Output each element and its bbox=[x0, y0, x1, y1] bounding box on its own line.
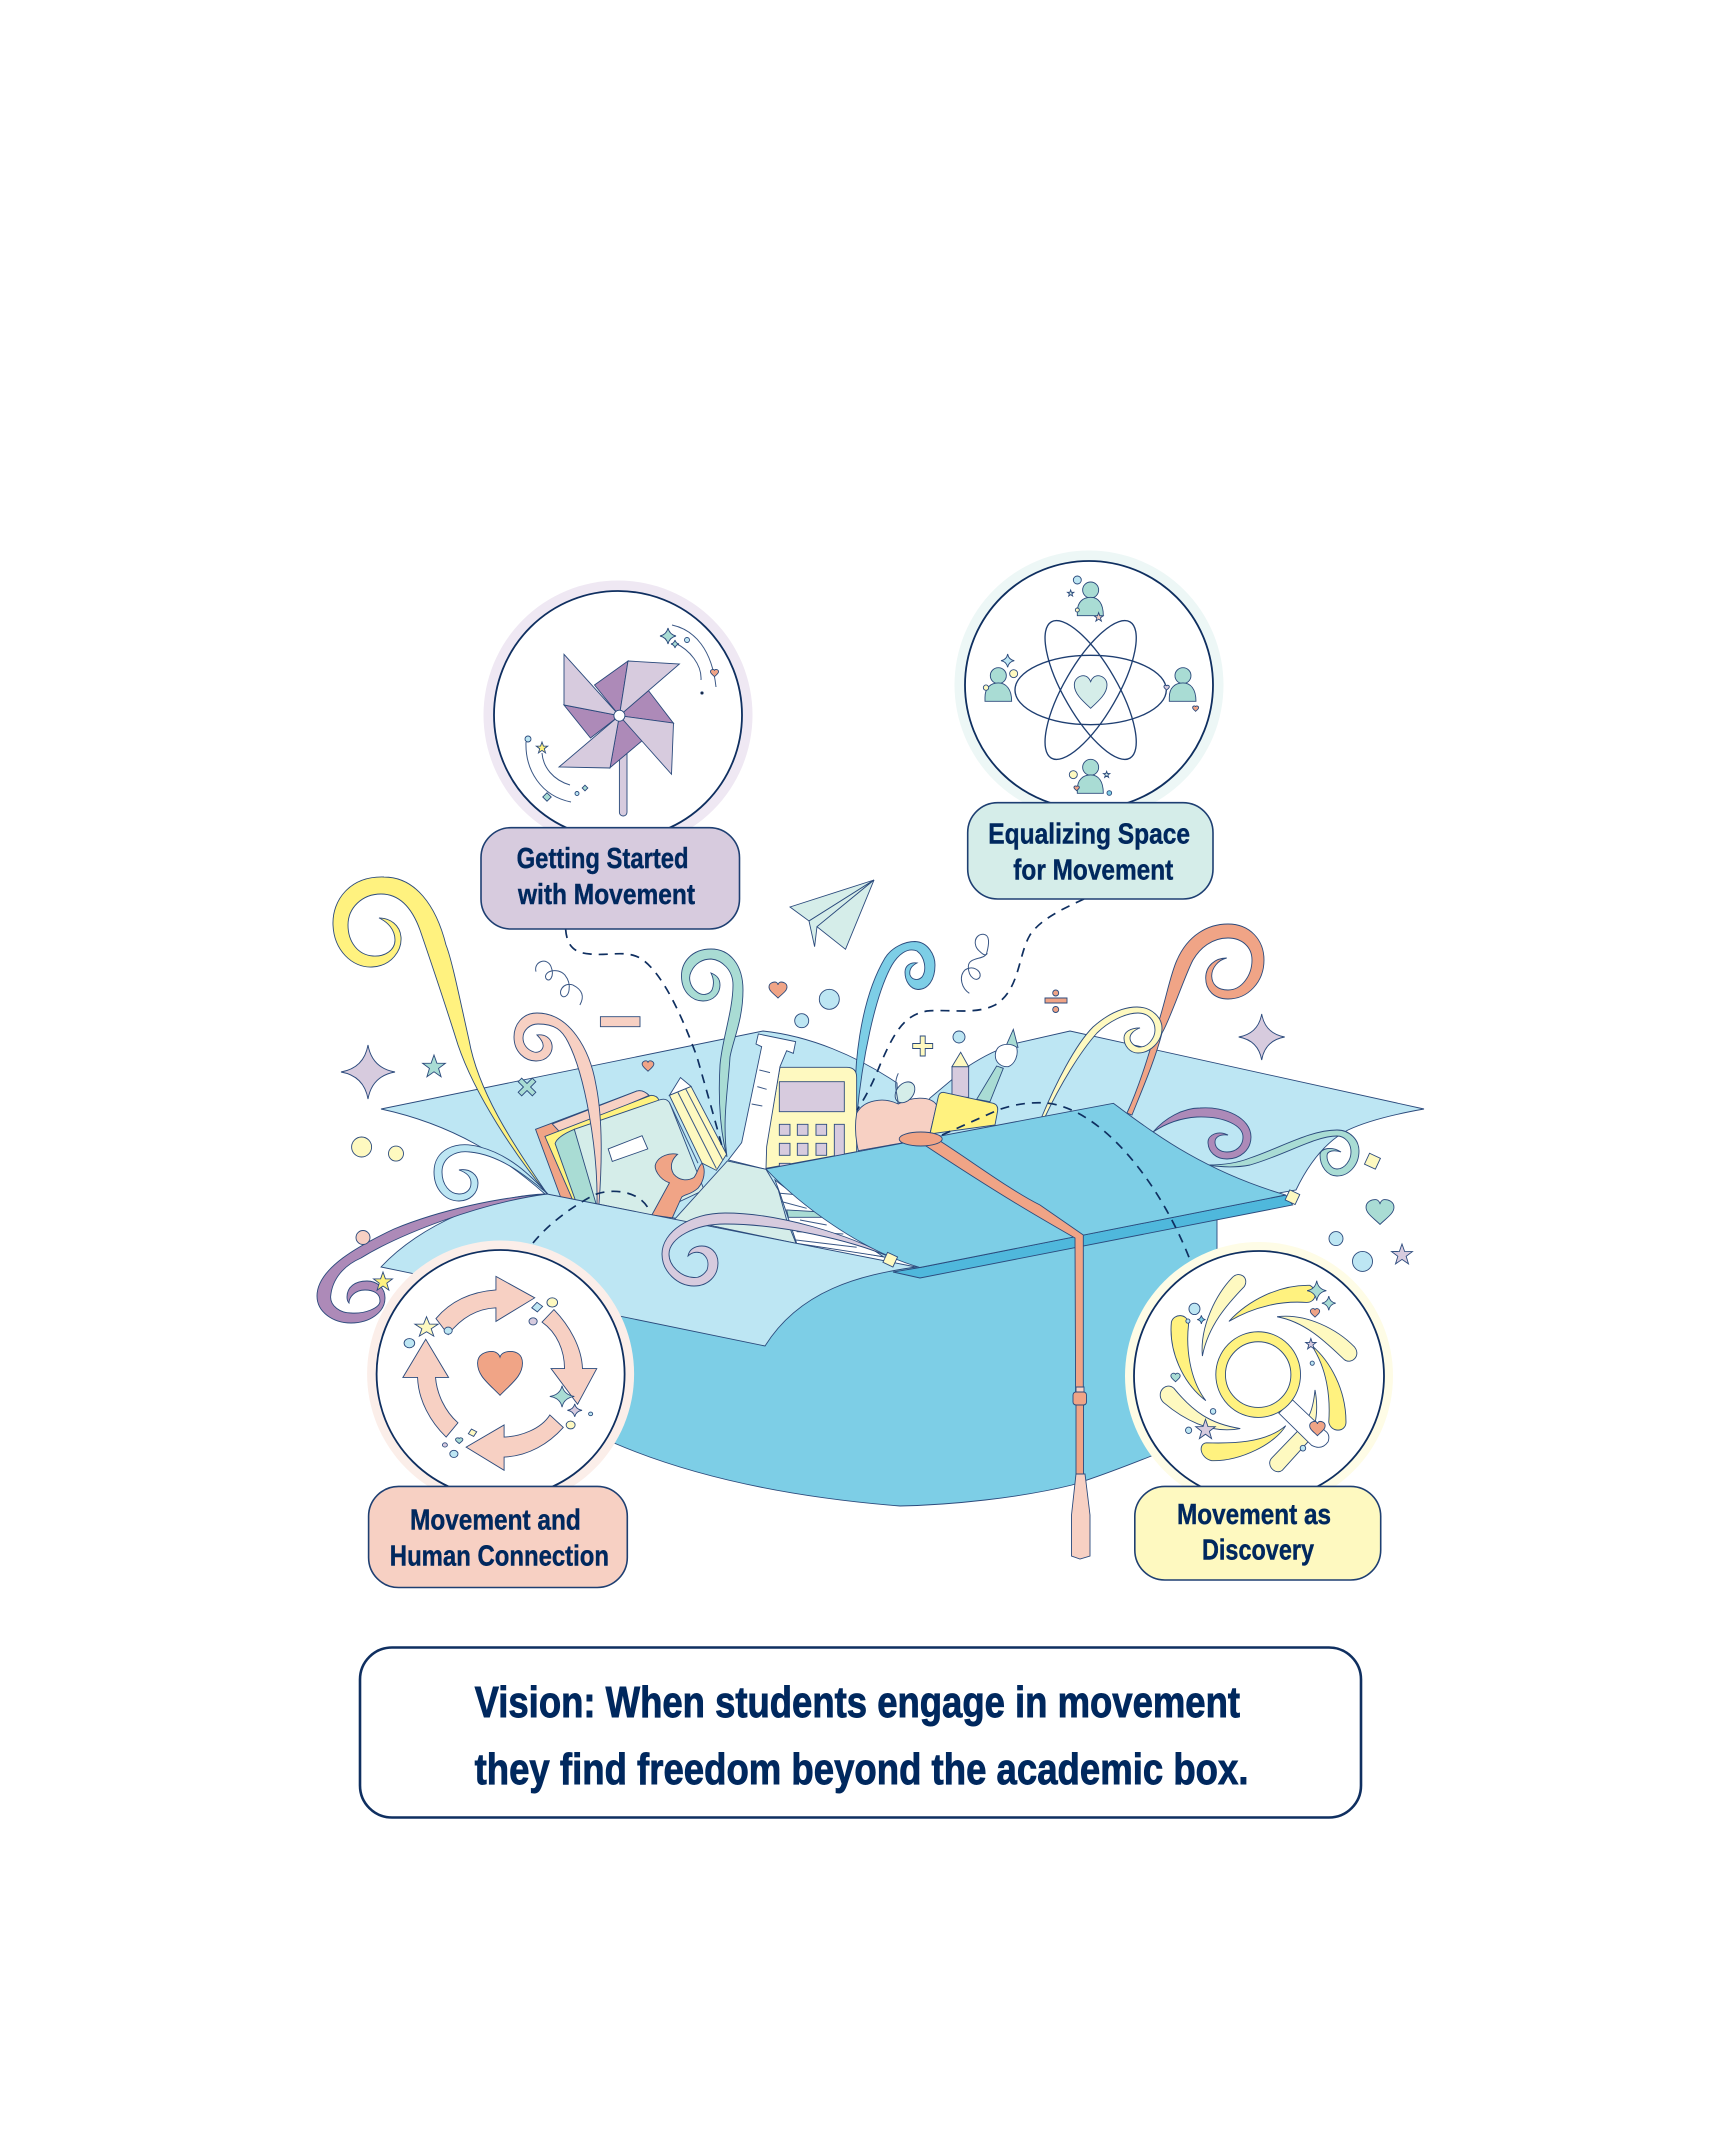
panel: movement as discovery bbox=[1125, 1242, 1393, 1580]
floating shapes left bbox=[341, 1017, 654, 1290]
back flap of box bbox=[381, 1031, 1424, 1260]
label: getting started: Getting Started bbox=[517, 843, 689, 875]
paper plane bbox=[790, 880, 874, 949]
icon: cycle arrows with heart bbox=[403, 1276, 597, 1470]
label: getting started: with Movement bbox=[517, 879, 695, 911]
school supplies: ruler, flask, calculator, notebook, apple bbox=[673, 1034, 937, 1257]
vision statement box bbox=[360, 1648, 1361, 1818]
school supplies: pencil, brush, eraser bbox=[930, 1029, 1018, 1134]
label: discovery bbox=[1135, 1486, 1381, 1580]
label: human connection bbox=[369, 1486, 627, 1588]
panel: getting started with movement bbox=[481, 580, 752, 929]
swirl: peach bbox=[514, 1013, 601, 1204]
label: equalizing space bbox=[968, 803, 1213, 899]
label: getting started bbox=[481, 828, 740, 929]
swirl: pale yellow bbox=[1042, 1007, 1162, 1117]
swirl: light blue bbox=[434, 1145, 548, 1201]
icon: magnifier and swirl petals bbox=[1160, 1275, 1357, 1472]
panel: equalizing space for movement bbox=[954, 550, 1224, 899]
front flap of box bbox=[381, 1194, 916, 1346]
swirl: orange bbox=[1127, 924, 1264, 1115]
mortarboard underside strip bbox=[893, 1195, 1293, 1278]
vision statement box: Vision: When students engage in movement bbox=[475, 1678, 1240, 1727]
swirl: blue bbox=[855, 942, 935, 1117]
squiggles bbox=[536, 934, 989, 1005]
panel: movement and human connection bbox=[367, 1240, 634, 1588]
floating shapes right bbox=[883, 1014, 1412, 1271]
label: human connection: Human Connection bbox=[390, 1541, 609, 1573]
swirl: lavender bbox=[662, 1213, 890, 1286]
swirl: teal right bbox=[1208, 1130, 1359, 1176]
label: equalizing space: Equalizing Space bbox=[988, 818, 1190, 850]
label: discovery: Movement as bbox=[1177, 1499, 1331, 1531]
label: human connection: Movement and bbox=[410, 1504, 581, 1536]
floating shapes centre bbox=[769, 982, 1067, 1056]
dashed connectors bbox=[533, 899, 1192, 1265]
vision statement box: they find freedom beyond the academic box. bbox=[475, 1745, 1249, 1794]
mortarboard top bbox=[766, 1103, 1286, 1268]
icon: pinwheel bbox=[525, 625, 719, 816]
tassel bbox=[899, 1132, 1090, 1559]
school supplies: books and wrench bbox=[536, 1077, 727, 1218]
icon: atom with people and heart bbox=[983, 576, 1199, 795]
swirl: purple right bbox=[1153, 1108, 1251, 1159]
cap box body bbox=[600, 1215, 1217, 1506]
label: discovery: Discovery bbox=[1202, 1535, 1314, 1567]
swirl: teal bbox=[681, 949, 743, 1157]
swirl: purple left bbox=[317, 1194, 547, 1323]
label: equalizing space: for Movement bbox=[1013, 854, 1174, 886]
swirl: yellow bbox=[333, 877, 548, 1195]
